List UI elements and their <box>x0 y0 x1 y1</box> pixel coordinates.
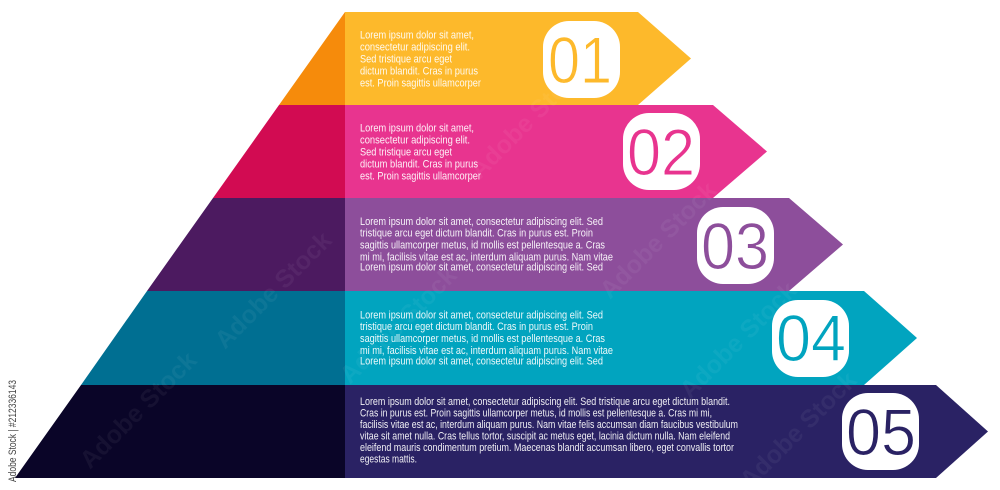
watermarks on colored bands: Adobe Stock <box>464 56 592 184</box>
watermarks on colored bands: Adobe Stock <box>334 261 462 389</box>
text block 03: mi mi, facilisis vitae est ac, interdum aliquam purus. Nam vitae <box>360 252 613 264</box>
panel: level 04 <box>81 291 917 385</box>
panel: level 01 <box>279 12 691 105</box>
number badge 02: 02 <box>627 115 695 189</box>
pyramid segment 03 <box>147 198 345 291</box>
text block 02 <box>360 122 481 182</box>
text block 03: Lorem ipsum dolor sit amet, consectetur adipiscing elit. Sed <box>360 262 603 274</box>
text block 05: eleifend mauris condimentum pretium. Maecenas blandit accumsan libero, eget convallis tortor <box>360 442 734 454</box>
text block 01: est. Proin sagittis ullamcorper <box>360 78 481 90</box>
arrow band 02 <box>345 105 767 198</box>
text block 02: est. Proin sagittis ullamcorper <box>360 170 481 182</box>
number badge 01: 01 <box>548 23 612 97</box>
text block 04 <box>360 310 613 368</box>
watermarks on colored bands: Adobe Stock <box>674 276 802 404</box>
watermarks on colored bands: Adobe Stock <box>74 346 202 474</box>
text block 01: consectetur adipiscing elit. <box>360 42 470 54</box>
panel: level 02 <box>213 105 767 198</box>
pyramid segment 05 <box>15 385 345 478</box>
pyramid segment 02 <box>213 105 345 198</box>
text block 05: Cras in purus est. Proin sagittis ullamcorper metus, id mollis est pellentesque a. Cras mi mi, <box>360 408 712 420</box>
text block 02: Sed tristique arcu eget <box>360 146 452 158</box>
text block 03: Lorem ipsum dolor sit amet, consectetur adipiscing elit. Sed <box>360 216 603 228</box>
stock image id label: Adobe Stock | #212336143 <box>7 380 19 482</box>
panel: level 03 <box>147 198 843 291</box>
text block 05: egestas mattis. <box>360 454 417 466</box>
pyramid segment 01 <box>279 12 345 105</box>
text block 04: tristique arcu eget dictum blandit. Cras in purus est. Proin <box>360 321 593 333</box>
text block 04: Lorem ipsum dolor sit amet, consectetur adipiscing elit. Sed <box>360 356 603 368</box>
text block 05: Lorem ipsum dolor sit amet, consectetur adipiscing elit. Sed tristique arcu eget dictum blandit. <box>360 396 730 408</box>
text block 01: Sed tristique arcu eget <box>360 54 452 66</box>
number badge 03: 03 <box>701 209 769 283</box>
watermarks on colored bands: Adobe Stock <box>209 226 337 354</box>
text block 02: dictum blandit. Cras in purus <box>360 158 478 170</box>
text block 03: tristique arcu eget dictum blandit. Cras in purus est. Proin <box>360 228 593 240</box>
text block 04: sagittis ullamcorper metus, id mollis est pellentesque a. Cras <box>360 333 605 345</box>
text block 04: Lorem ipsum dolor sit amet, consectetur adipiscing elit. Sed <box>360 310 603 322</box>
number badge 05: 05 <box>846 395 916 469</box>
arrow band 05 <box>345 385 988 478</box>
number badge 04: 04 <box>776 301 846 375</box>
text block 02: Lorem ipsum dolor sit amet, <box>360 122 474 134</box>
text block 05: facilisis vitae est ac, interdum aliquam purus. Nam vitae felis accumsan diam faucibus vestibulum <box>360 419 738 431</box>
text block 04: mi mi, facilisis vitae est ac, interdum aliquam purus. Nam vitae <box>360 345 613 357</box>
text block 05 <box>360 396 738 466</box>
text block 03 <box>360 216 613 274</box>
text block 01: Lorem ipsum dolor sit amet, <box>360 30 474 42</box>
arrow band 03 <box>345 198 843 291</box>
text block 03: sagittis ullamcorper metus, id mollis est pellentesque a. Cras <box>360 240 605 252</box>
text block 05: vitae sit amet nulla. Cras tellus tortor, suscipit ac metus eget, lacinia dictum nulla. Nam eleifend <box>360 430 730 442</box>
watermarks on colored bands: Adobe Stock <box>34 56 162 184</box>
arrow band 04 <box>345 291 917 385</box>
text block 01 <box>360 30 481 90</box>
pyramid segment 04 <box>81 291 345 385</box>
panel: level 05 <box>15 385 988 478</box>
arrow band 01 <box>345 12 691 105</box>
text block 02: consectetur adipiscing elit. <box>360 134 470 146</box>
text block 01: dictum blandit. Cras in purus <box>360 66 478 78</box>
watermarks on colored bands: Adobe Stock <box>594 176 722 304</box>
watermarks on colored bands <box>34 56 862 490</box>
